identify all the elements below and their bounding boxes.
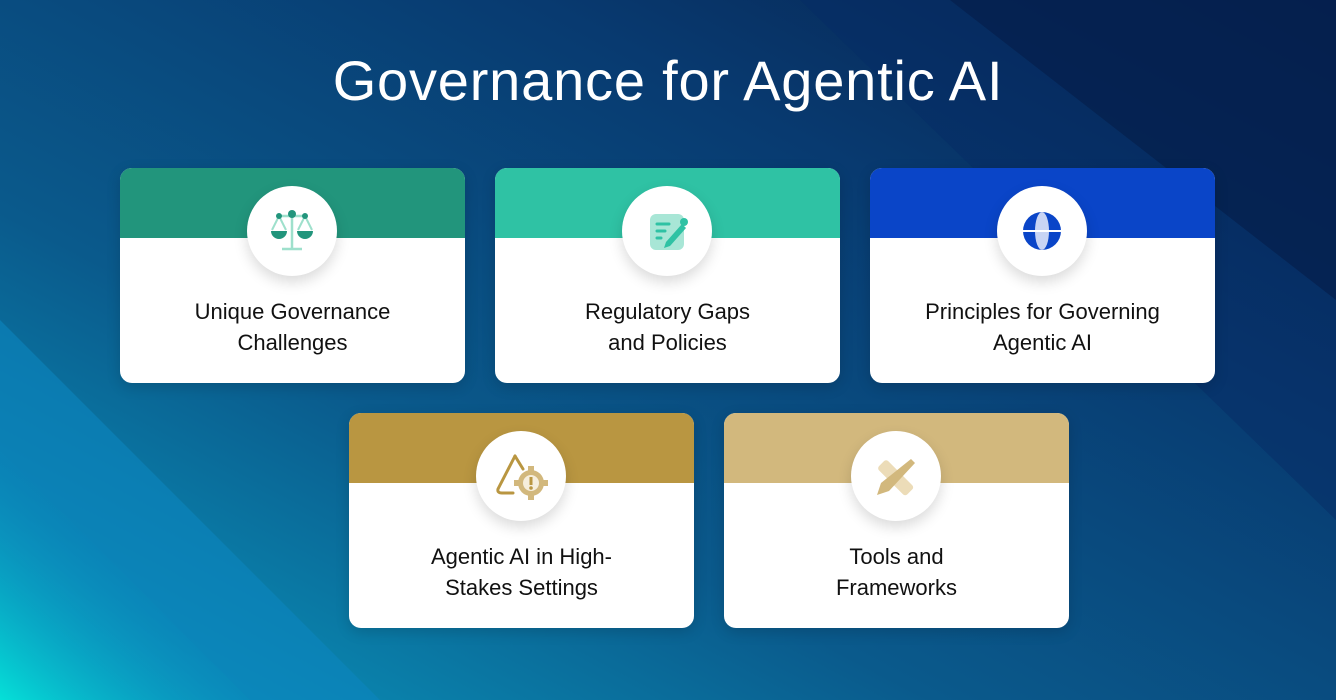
card: high-stakes: Agentic AI in High-: [431, 544, 612, 569]
card: unique governance challenges: [120, 168, 465, 383]
card: tools: Tools and: [849, 544, 944, 569]
card: tools: [724, 413, 1069, 628]
card: tools: Frameworks: [836, 575, 957, 600]
card: unique governance challenges: Challenges: [237, 330, 348, 355]
card: principles: Agentic AI: [993, 330, 1092, 355]
title: Governance for Agentic AI: [333, 49, 1003, 112]
card: high-stakes: Stakes Settings: [445, 575, 598, 600]
icon: globe: [997, 186, 1087, 276]
card: regulatory gaps: and Policies: [608, 330, 727, 355]
icon: scales: [247, 186, 337, 276]
card: regulatory gaps: [495, 168, 840, 383]
icon: warning gear: [476, 431, 566, 521]
card: principles: [870, 168, 1215, 383]
icon: document pen: [622, 186, 712, 276]
card: regulatory gaps: Regulatory Gaps: [585, 299, 750, 324]
card: principles: Principles for Governing: [925, 299, 1160, 324]
card: unique governance challenges: Unique Governance: [195, 299, 390, 324]
icon: pencil ruler: [851, 431, 941, 521]
card: high-stakes: [349, 413, 694, 628]
